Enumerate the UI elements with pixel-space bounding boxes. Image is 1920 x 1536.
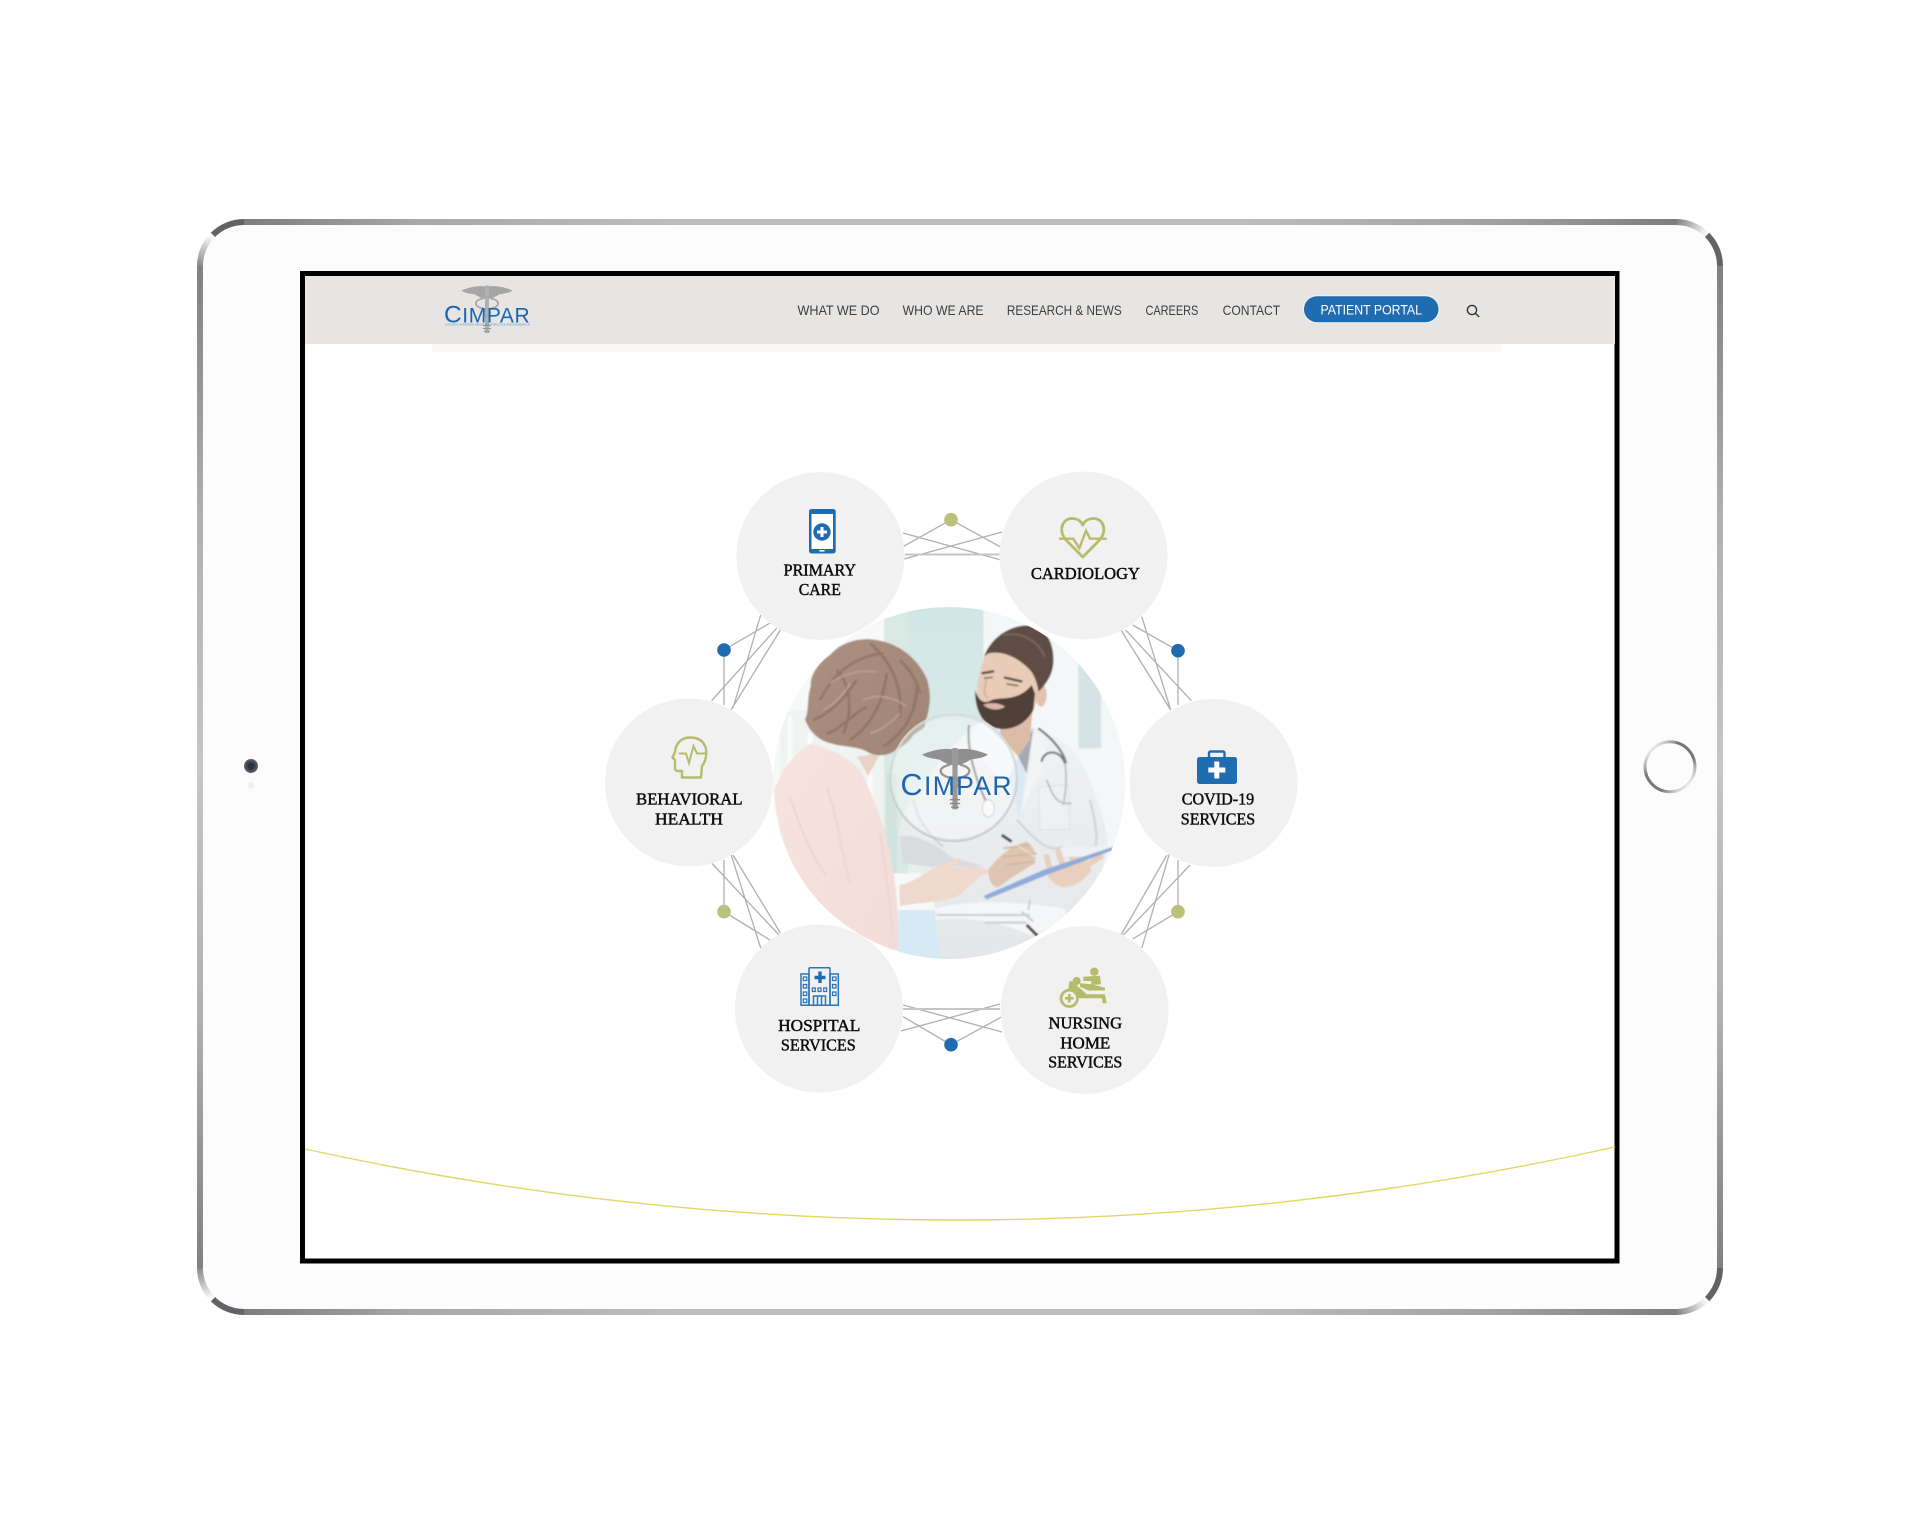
doctor's hands — [988, 842, 1036, 887]
doctor's hair — [984, 625, 1053, 692]
service circle: cardiology: CARDIOLOGY — [1031, 564, 1140, 583]
central logo: CIMPAR — [900, 768, 1013, 802]
service circle: hospital services — [735, 924, 903, 1092]
navigation menu — [798, 302, 1281, 318]
navigation menu: CONTACT — [1223, 302, 1281, 318]
central photo: patient and doctor — [770, 600, 1137, 967]
service circle: primary care — [736, 472, 904, 640]
service circle: behavioral health: HEALTH — [655, 810, 723, 829]
header logo: CHICAGO INTERNAL MEDICINE PRACTICE AND RESEARCH — [445, 322, 530, 326]
service circle: behavioral health — [605, 698, 773, 866]
decorative yellow curve — [305, 1147, 1615, 1220]
icon: search — [1467, 305, 1479, 317]
translucent logo disc — [891, 714, 1017, 841]
service circle: hospital services: HOSPITAL — [778, 1016, 860, 1035]
service circle: covid-19 services: COVID-19 — [1182, 790, 1254, 809]
icon: front camera — [244, 759, 258, 789]
stethoscope — [969, 725, 1066, 802]
service circle: behavioral health: BEHAVIORAL — [636, 790, 743, 809]
service circle: primary care: PRIMARY — [784, 560, 856, 580]
service circle: covid-19 services — [1130, 699, 1298, 867]
service circle: covid-19 services: SERVICES — [1181, 810, 1255, 829]
service circle: primary care: CARE — [799, 580, 841, 599]
shirt — [990, 728, 1033, 814]
header logo — [444, 286, 530, 333]
service circle: nursing home services: NURSING — [1049, 1014, 1122, 1033]
header logo: CIMPAR — [444, 302, 530, 329]
navigation menu: WHO WE ARE — [903, 302, 984, 318]
icon: home button — [1645, 742, 1695, 792]
neck and face — [999, 712, 1033, 757]
clipboard — [1060, 845, 1113, 857]
navigation menu: WHAT WE DO — [798, 302, 880, 318]
navigation menu: CAREERS — [1146, 302, 1198, 318]
service circle: cardiology — [1000, 472, 1168, 640]
site header bar — [305, 276, 1615, 352]
service circle: hospital services: SERVICES — [781, 1036, 856, 1054]
navigation menu: RESEARCH & NEWS — [1007, 302, 1122, 318]
tablet body — [200, 222, 1720, 1312]
patient portal button — [1304, 296, 1439, 323]
coat — [898, 720, 1107, 962]
doctor's beard — [975, 685, 1035, 729]
connector dots — [717, 513, 1185, 1051]
central logo — [900, 748, 1013, 809]
tablet mockup infographic — [197, 219, 1723, 1315]
service circle: nursing home services: HOME — [1060, 1033, 1110, 1052]
woman's top — [774, 743, 899, 952]
tablet screen — [302, 274, 1617, 1261]
woman's hair — [805, 639, 930, 755]
service circle: nursing home services: SERVICES — [1048, 1053, 1122, 1072]
patient portal button: PATIENT PORTAL — [1320, 302, 1422, 318]
woman's hand and arm — [899, 865, 984, 906]
network connector lines — [712, 520, 1191, 1045]
service circle: nursing home services — [1001, 926, 1169, 1094]
